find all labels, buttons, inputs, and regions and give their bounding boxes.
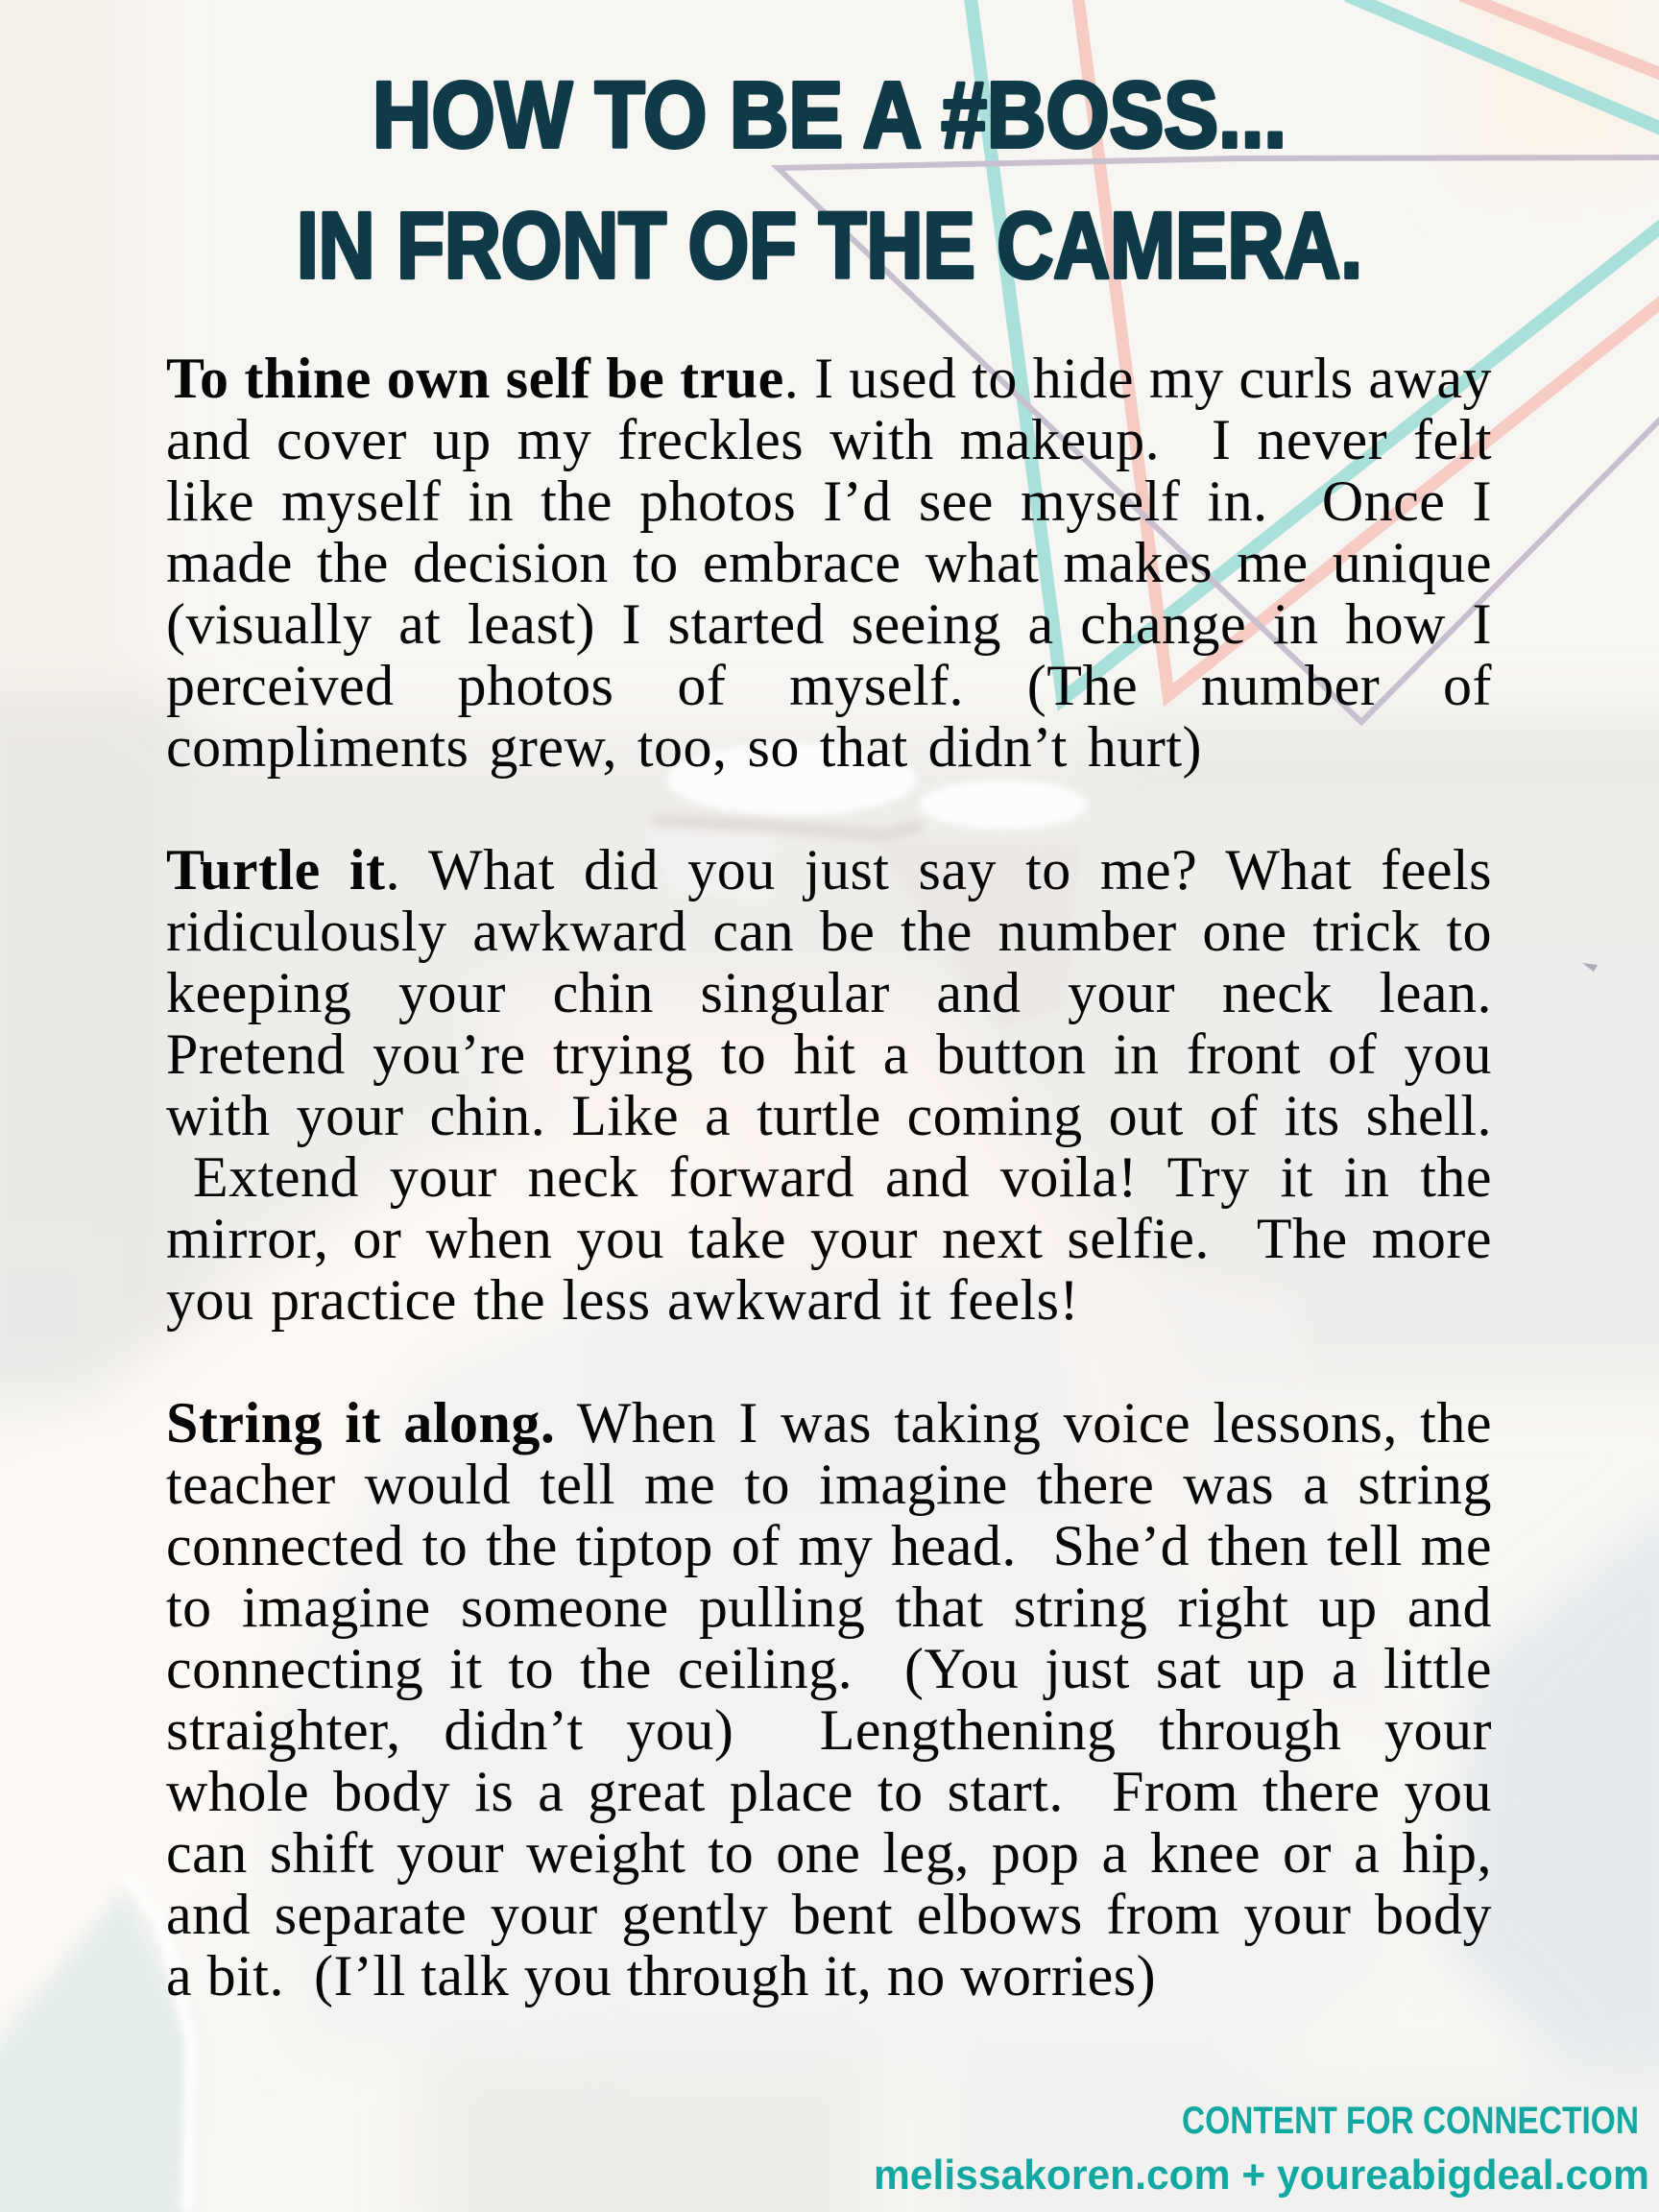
paragraph: string it along: straighter, didn’t you) Lengthening through your [166, 1698, 1492, 1762]
paragraph: string it along [166, 1391, 1492, 2008]
paragraph: string it along: connected to the tiptop of my head. She’d then tell me [166, 1514, 1492, 1577]
paragraph: to thine own self be true: perceived photos of myself. (The number of [166, 654, 1492, 717]
paragraph: turtle it: Extend your neck forward and voila! Try it in the [193, 1145, 1492, 1209]
paragraph: to thine own self be true: To thine own self be true. I used to hide my curls away [166, 347, 1492, 410]
paragraph: turtle it: mirror, or when you take your next selfie. The more [166, 1207, 1492, 1270]
paragraph: to thine own self be true: (visually at least) I started seeing a change in how I [166, 592, 1492, 656]
paragraph: string it along: teacher would tell me to imagine there was a string [166, 1453, 1492, 1516]
paragraph: turtle it: ridiculously awkward can be the number one trick to [166, 900, 1492, 963]
pink triangle line [1077, 0, 1659, 695]
white shirt strap edge [127, 1872, 192, 2212]
footer line 2: melissakoren.com + youreabigdeal.com [874, 2152, 1649, 2199]
paragraph: string it along: String it along. When I was taking voice lessons, the [166, 1391, 1492, 1455]
paragraph: turtle it: Pretend you’re trying to hit a button in front of you [166, 1022, 1492, 1086]
title line 2: IN FRONT OF THE CAMERA. [297, 193, 1362, 298]
paragraph: string it along: to imagine someone pulling that string right up and [166, 1575, 1492, 1639]
paragraph: turtle it: with your chin. Like a turtle coming out of its shell. [166, 1084, 1492, 1147]
paragraph: string it along: whole body is a great place to start. From there you [166, 1760, 1492, 1823]
paragraph: string it along: and separate your gently bent elbows from your body [166, 1883, 1492, 1946]
cupcake shadow [653, 821, 922, 835]
paragraph: turtle it [166, 838, 1492, 1332]
paragraph: turtle it: keeping your chin singular and your neck lean. [166, 961, 1492, 1024]
cupcake frosting [667, 743, 917, 816]
paragraph: turtle it: Turtle it. What did you just say to me? What feels [166, 838, 1492, 902]
paragraph: to thine own self be true: compliments grew, too, so that didn’t hurt) [166, 715, 1202, 779]
paragraph: to thine own self be true [166, 347, 1492, 779]
paragraph: string it along: can shift your weight to one leg, pop a knee or a hip, [166, 1821, 1492, 1885]
paragraph: turtle it: you practice the less awkward it feels! [166, 1268, 1079, 1332]
paragraph: to thine own self be true: like myself in the photos I’d see myself in. Once I [166, 469, 1492, 533]
paragraph: to thine own self be true: made the decision to embrace what makes me unique [166, 531, 1492, 594]
paragraph: to thine own self be true: and cover up my freckles with makeup. I never felt [166, 408, 1492, 471]
small purple mark [1582, 963, 1598, 972]
title line 1: HOW TO BE A #BOSS... [373, 62, 1286, 167]
paragraph: string it along: a bit. (I’ll talk you through it, no worries) [166, 1944, 1156, 2008]
paragraph: string it along: connecting it to the ceiling. (You just sat up a little [166, 1637, 1492, 1700]
cupcake wrappers [643, 826, 778, 901]
teal triangle line [970, 0, 1659, 699]
purple triangle line [778, 157, 1659, 722]
